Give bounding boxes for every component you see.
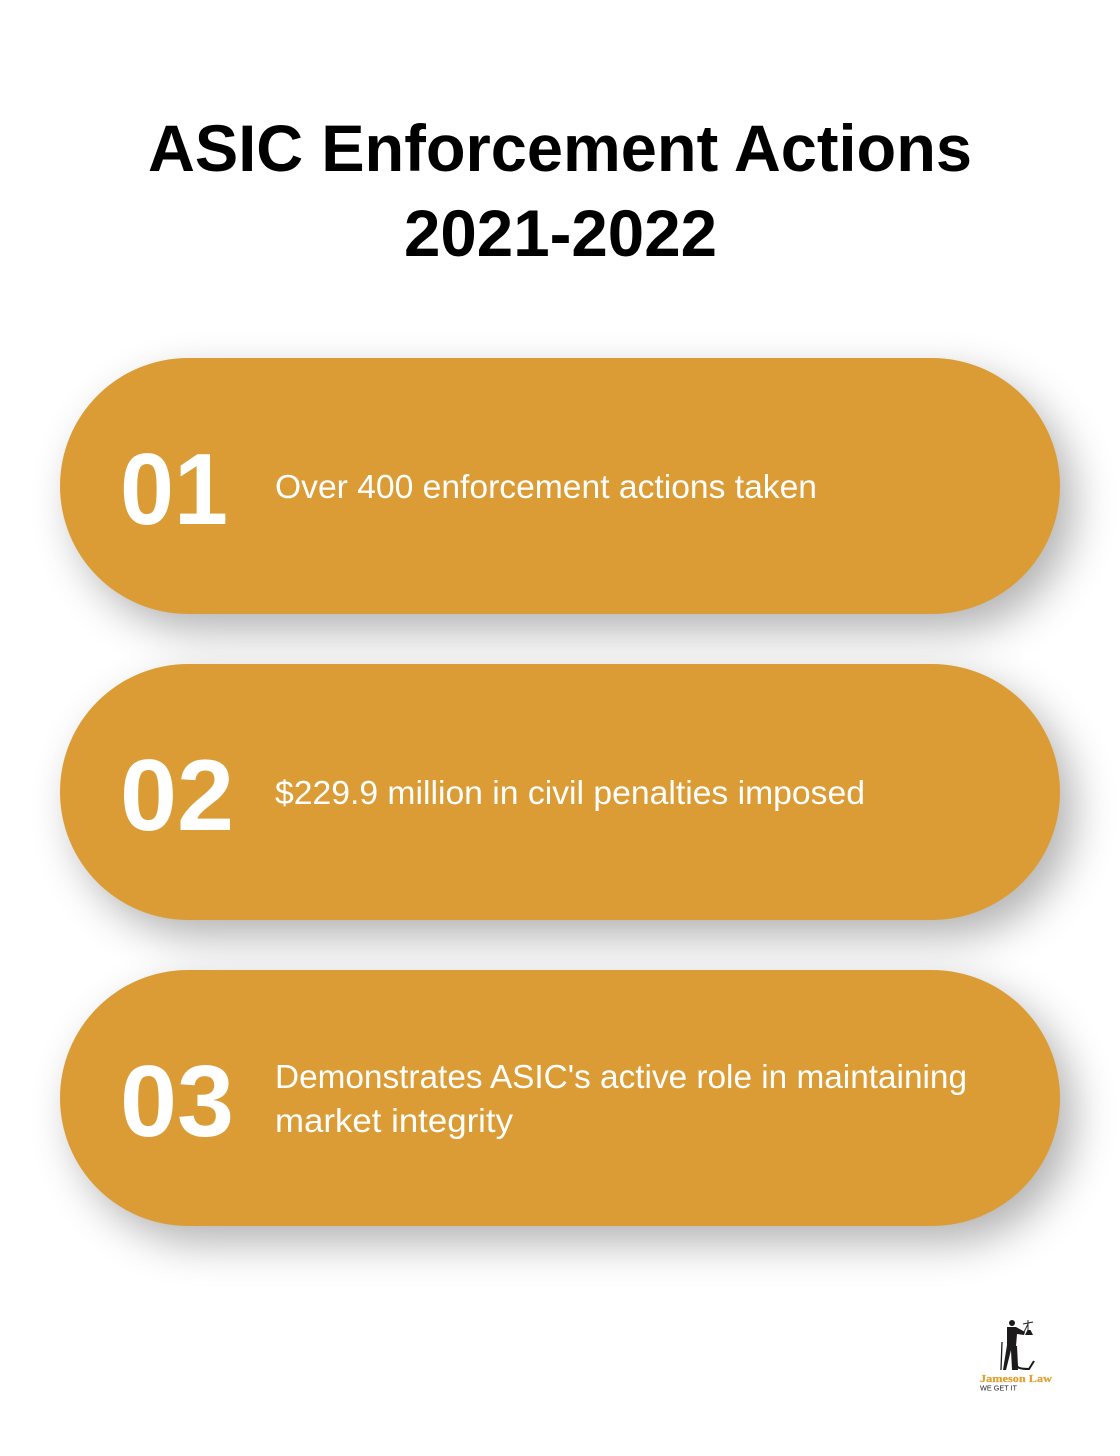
logo: Jameson Law xyxy=(980,1320,1052,1392)
logo name: Jameson Law xyxy=(980,1373,1052,1385)
text: item 02: $229.9 million in civil penalties imposed xyxy=(275,774,865,811)
panel: item 01 xyxy=(60,358,1060,614)
text: item 01: Over 400 enforcement actions taken xyxy=(275,468,817,505)
icon: lady justice xyxy=(1001,1320,1034,1370)
panel: item 02 xyxy=(60,664,1060,920)
text: item 03: Demonstrates ASIC's active role in maintaining xyxy=(275,1058,967,1095)
number 02: 02 xyxy=(120,740,234,852)
number 01: 01 xyxy=(120,434,228,546)
panel: item 03 xyxy=(60,970,1060,1226)
title: ASIC Enforcement Actions xyxy=(148,111,972,185)
logo tagline: WE GET IT xyxy=(980,1386,1018,1392)
title: 2021-2022 xyxy=(404,196,717,270)
title xyxy=(148,111,972,270)
number 03: 03 xyxy=(120,1046,234,1158)
text: item 03 xyxy=(275,1058,967,1139)
text: item 03: market integrity xyxy=(275,1102,514,1139)
